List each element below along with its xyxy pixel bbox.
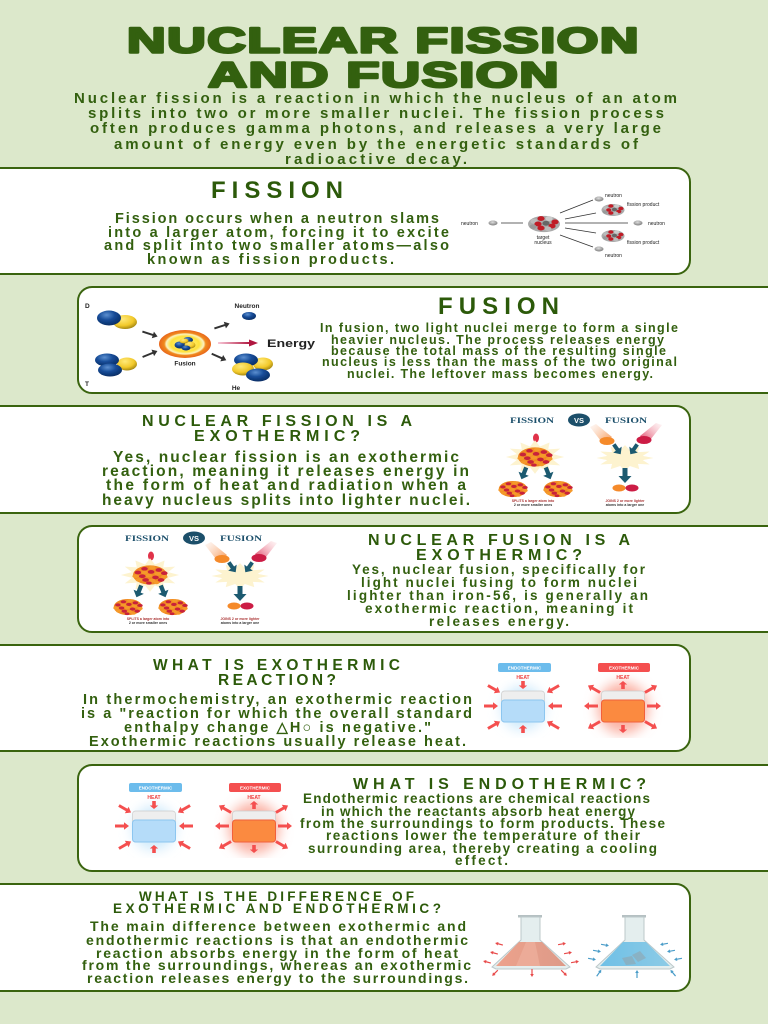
heading: fission: FISSION (211, 177, 343, 204)
intro text (74, 90, 677, 168)
fission diagram: fission product (627, 202, 660, 208)
title: AND FUSION (208, 56, 560, 95)
fission exothermic text: the form of heat and radiation when a (106, 477, 466, 494)
heading: difference: EXOTHERMIC AND ENDOTHERMIC? (113, 901, 441, 916)
beaker diagram: ENDOTHERMIC (508, 666, 542, 670)
heading: nuclear fusion exothermic: NUCLEAR FUSION IS A (368, 532, 630, 549)
panel: difference (0, 884, 690, 991)
beaker diagram: HEAT (616, 675, 630, 681)
panel: fission (0, 168, 690, 274)
heading: fusion: FUSION (438, 293, 559, 320)
endothermic text: surrounding area, thereby creating a cooling (308, 841, 657, 856)
fusion diagram: Fusion (174, 360, 196, 368)
intro text: splits into two or more smaller nuclei. The fission process (88, 105, 664, 122)
panel: is fusion exothermic (78, 526, 768, 632)
panel: what is exothermic (0, 645, 690, 751)
exothermic text: Exothermic reactions usually release heat. (89, 734, 466, 750)
difference text: The main difference between exothermic and (90, 918, 466, 934)
fission vs fusion diagram copy: FUSION (220, 534, 262, 543)
beaker diagram copy: HEAT (247, 795, 261, 801)
endothermic text (300, 791, 665, 868)
fission exothermic text (102, 449, 470, 509)
fission vs fusion diagram: SPLITS a larger atom into (512, 499, 554, 503)
fission diagram: neutron (461, 221, 478, 227)
fission text: known as fission products. (147, 252, 394, 268)
fusion exothermic text: light nuclei fusing to form nuclei (361, 575, 637, 590)
heading: what is exothermic: REACTION? (218, 672, 336, 689)
fission exothermic text: Yes, nuclear fission is an exothermic (113, 449, 459, 466)
heading: what is endothermic: WHAT IS ENDOTHERMIC? (353, 776, 646, 793)
fission vs fusion diagram: FUSION (605, 416, 647, 425)
fission vs fusion diagram copy: 2 or more smaller ones (129, 621, 167, 625)
heading: what is exothermic (153, 657, 400, 689)
fission diagram: neutron (648, 221, 665, 227)
intro text: radioactive decay. (285, 151, 467, 168)
difference text: reaction absorbs energy in the form of heat (96, 945, 458, 961)
heading: nuclear fusion exothermic (368, 532, 630, 564)
beaker diagram (484, 663, 661, 734)
difference text: reaction releases energy to the surroundings. (87, 970, 468, 986)
fission text: into a larger atom, forcing it to excite (108, 225, 449, 241)
fusion diagram: T (85, 381, 89, 388)
fission vs fusion diagram copy: FISSION (125, 534, 169, 543)
exothermic text: In thermochemistry, an exothermic reaction (83, 692, 472, 708)
fusion text: heavier nucleus. The process releases energy (331, 333, 664, 347)
fusion diagram: D (85, 303, 90, 310)
heading: nuclear fusion exothermic: EXOTHERMIC? (416, 547, 582, 564)
beaker diagram copy (115, 783, 292, 854)
endothermic text: Endothermic reactions are chemical reactions (303, 791, 650, 806)
fusion diagram: He (232, 385, 241, 392)
intro text: Nuclear fission is a reaction in which the nucleus of an atom (74, 90, 677, 107)
endothermic text: effect. (455, 853, 508, 868)
flask: endothermic (588, 915, 682, 978)
beaker diagram: HEAT (516, 675, 530, 681)
fission text: and split into two smaller atoms—also (104, 238, 449, 254)
heading: nuclear fission exothermic (142, 413, 412, 445)
title (127, 22, 640, 95)
fusion exothermic text: lighter than iron-56, is generally an (347, 588, 648, 603)
heading: what is exothermic: WHAT IS EXOTHERMIC (153, 657, 400, 674)
fission text (104, 211, 449, 268)
fission exothermic text: reaction, meaning it releases energy in (102, 463, 469, 480)
fusion exothermic text: exothermic reaction, meaning it (365, 601, 634, 616)
fission diagram: neutron (605, 253, 622, 259)
exothermic text: enthalpy change △H○ is negative." (124, 720, 431, 736)
fusion diagram: Neutron (235, 303, 259, 310)
panel: fusion (78, 287, 768, 393)
fission diagram: target (537, 235, 550, 241)
title: NUCLEAR FISSION (127, 22, 640, 60)
difference text (82, 918, 471, 986)
fusion diagram (85, 303, 316, 392)
fission diagram (461, 193, 665, 259)
beaker diagram copy: ENDOTHERMIC (139, 786, 173, 790)
intro text: amount of energy even by the energetic standards of (114, 136, 639, 153)
fission exothermic text: heavy nucleus splits into lighter nuclei. (102, 492, 470, 509)
fission vs fusion diagram: JOINS 2 or more lighter (605, 499, 645, 503)
heading: difference (113, 889, 441, 916)
heading: difference: WHAT IS THE DIFFERENCE OF (139, 889, 414, 904)
heading: nuclear fission exothermic: NUCLEAR FISSION IS A (142, 413, 412, 430)
fission diagram: nucleus (534, 240, 552, 246)
endothermic text: reactions lower the temperature of their (326, 828, 641, 843)
fission vs fusion diagram copy (113, 532, 277, 625)
fission vs fusion diagram: atoms into a larger one (606, 503, 644, 507)
beaker diagram copy: EXOTHERMIC (240, 786, 271, 790)
fusion exothermic text: Yes, nuclear fusion, specifically for (352, 562, 646, 577)
fission diagram: neutron (605, 193, 622, 199)
endothermic text: in which the reactants absorb heat energy (321, 804, 635, 819)
beaker diagram copy: HEAT (147, 795, 161, 801)
heading: nuclear fission exothermic: EXOTHERMIC? (194, 428, 360, 445)
fusion text: In fusion, two light nuclei merge to form a single (320, 321, 678, 335)
beaker diagram: EXOTHERMIC (609, 666, 640, 670)
fusion exothermic text (347, 562, 648, 629)
fusion exothermic text: releases energy. (429, 614, 569, 629)
endothermic text: from the surroundings to form products. These (300, 816, 665, 831)
intro text: often produces gamma photons, and releases a very large (90, 120, 661, 137)
fusion text: because the total mass of the resulting single (331, 344, 666, 358)
fusion diagram: Energy (267, 338, 316, 350)
difference text: endothermic reactions is that an endothermic (86, 932, 468, 948)
fission vs fusion diagram: VS (574, 416, 584, 425)
fusion text: nuclei. The leftover mass becomes energy. (347, 367, 653, 381)
exothermic text (81, 692, 472, 750)
fusion text: nucleus is less than the mass of the two original (322, 355, 677, 369)
fission vs fusion diagram copy: JOINS 2 or more lighter (220, 617, 260, 621)
fission vs fusion diagram copy: atoms into a larger one (221, 621, 259, 625)
fission vs fusion diagram (498, 414, 662, 507)
flask: exothermic (483, 915, 579, 977)
panel: is fission exothermic (0, 406, 690, 513)
fission vs fusion diagram copy: SPLITS a larger atom into (127, 617, 169, 621)
fission text: Fission occurs when a neutron slams (115, 211, 439, 227)
fusion text (320, 321, 678, 381)
fission vs fusion diagram: FISSION (510, 416, 554, 425)
fission diagram: fission product (627, 240, 660, 246)
fission vs fusion diagram: 2 or more smaller ones (514, 503, 552, 507)
exothermic text: is a "reaction for which the overall standard (81, 706, 472, 722)
fission vs fusion diagram copy: VS (189, 534, 199, 543)
difference text: from the surroundings, whereas an exothermic (82, 957, 471, 973)
panel: what is endothermic (78, 765, 768, 871)
